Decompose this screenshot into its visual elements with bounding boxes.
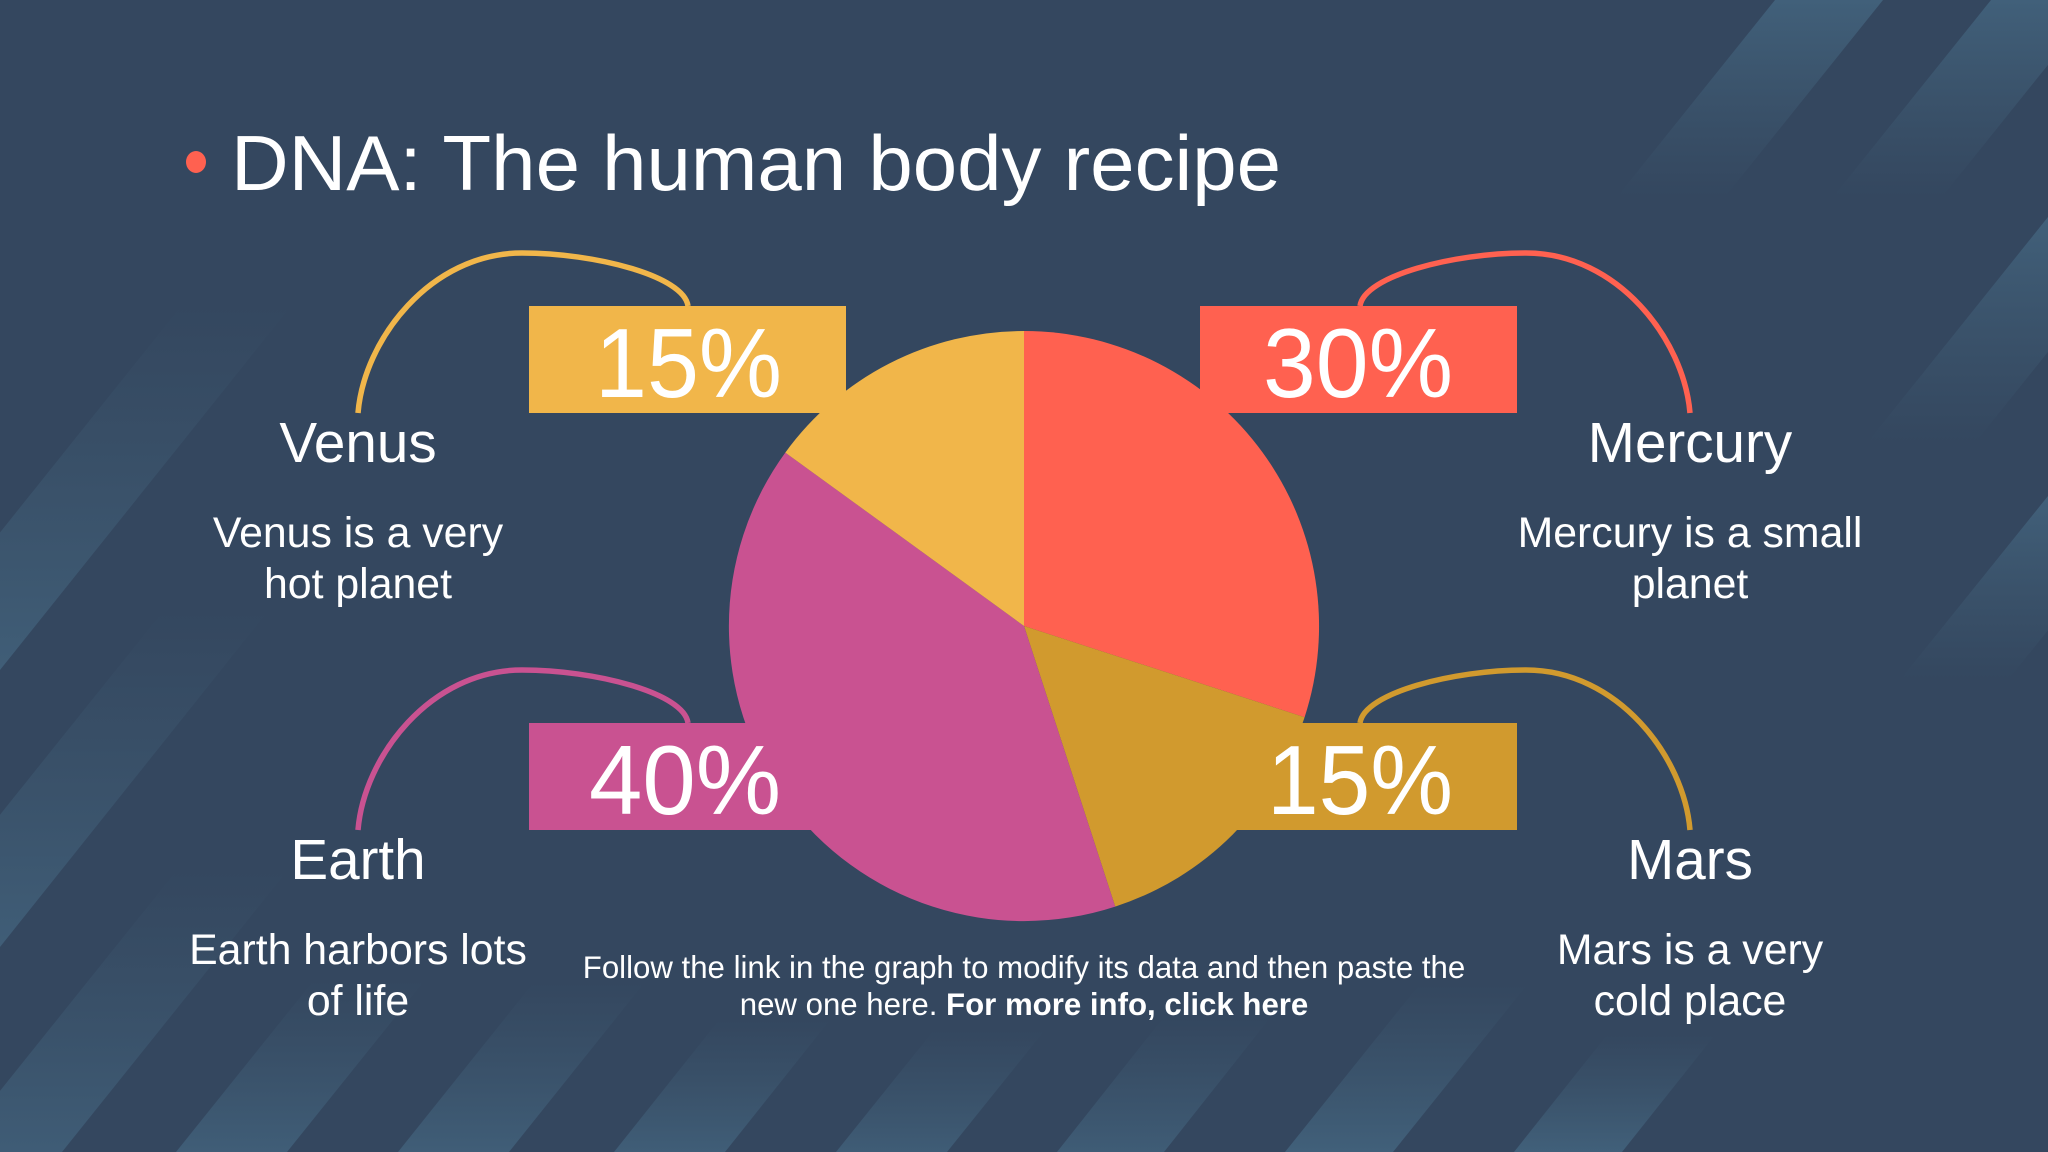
Mercury description: planet bbox=[1632, 560, 1748, 608]
connector: Mars bbox=[1360, 670, 1690, 830]
Mars percentage: 15% bbox=[1267, 725, 1453, 835]
Mercury description: Mercury is a small bbox=[1518, 509, 1862, 557]
Mars description: cold place bbox=[1594, 977, 1786, 1025]
connector: Venus bbox=[358, 253, 688, 413]
Venus description: hot planet bbox=[264, 560, 452, 608]
slice: Mercury 30% bbox=[1024, 331, 1319, 717]
Venus percentage: 15% bbox=[595, 308, 782, 418]
Venus description: Venus is a very bbox=[213, 509, 503, 557]
Earth description: Earth harbors lots bbox=[189, 926, 527, 974]
callout: Mercury bbox=[1200, 253, 1862, 608]
pie chart bbox=[729, 331, 1319, 921]
callout: Mars bbox=[1200, 670, 1824, 1025]
title bbox=[186, 119, 1281, 207]
Mars percentage box bbox=[1200, 723, 1517, 830]
footnote: new one here. For more info, click here bbox=[740, 987, 1308, 1022]
callout: Venus bbox=[213, 253, 846, 608]
callout: Earth bbox=[189, 670, 846, 1025]
Mercury name: Mercury bbox=[1588, 411, 1793, 474]
icon: title bullet bbox=[186, 151, 206, 173]
slice: Venus 15% bbox=[785, 331, 1024, 626]
Earth name: Earth bbox=[290, 828, 426, 891]
connector: Mercury bbox=[1360, 253, 1690, 413]
Mercury percentage: 30% bbox=[1263, 308, 1453, 418]
Earth percentage box bbox=[529, 723, 846, 830]
slice: Mars 15% bbox=[1024, 626, 1305, 907]
Mars description: Mars is a very bbox=[1557, 926, 1823, 974]
Earth description: of life bbox=[307, 977, 409, 1025]
Earth percentage: 40% bbox=[589, 725, 781, 835]
title text: DNA: The human body recipe bbox=[231, 119, 1281, 207]
Mercury percentage box bbox=[1200, 306, 1517, 413]
connector: Earth bbox=[358, 670, 688, 830]
Mars name: Mars bbox=[1627, 828, 1753, 891]
slice: Earth 40% bbox=[729, 453, 1115, 921]
footnote: Follow the link in the graph to modify its data and then paste the bbox=[583, 950, 1465, 985]
Venus percentage box bbox=[529, 306, 846, 413]
Venus name: Venus bbox=[279, 411, 437, 474]
